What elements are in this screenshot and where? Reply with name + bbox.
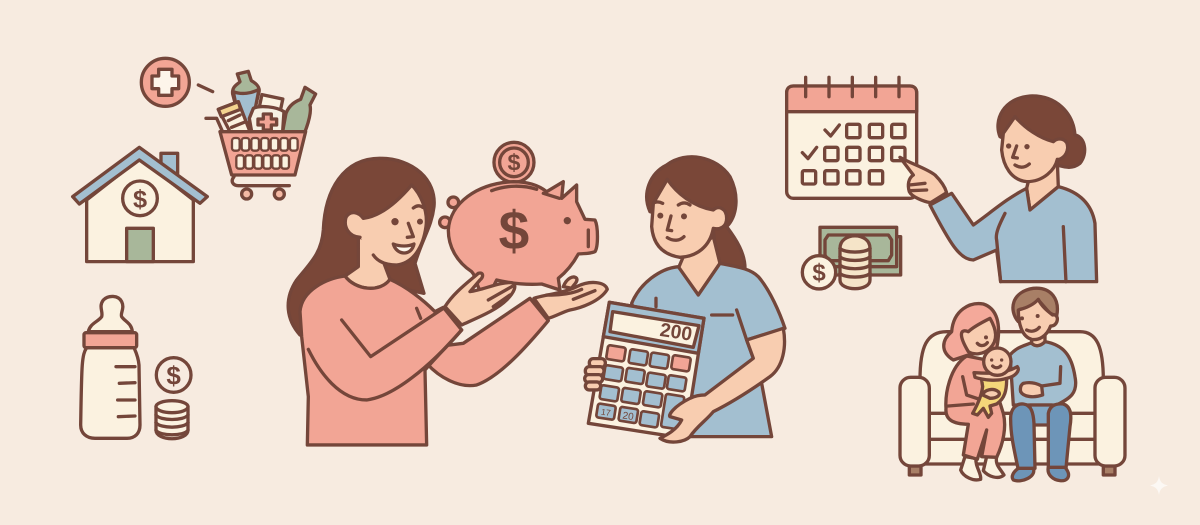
man (1013, 288, 1057, 322)
hair (288, 158, 434, 335)
character: woman pointing at calendar (900, 96, 1097, 282)
pointing hand (900, 157, 947, 203)
woman (944, 304, 999, 360)
icon: house with dollar sign: $ (133, 185, 147, 213)
icon: piggy bank with coin: $ (507, 150, 520, 176)
icon: house with dollar sign (73, 147, 207, 262)
baby (973, 377, 1007, 417)
neck (345, 237, 393, 288)
calculator: 17 (600, 407, 612, 418)
face (345, 185, 426, 265)
icon: piggy bank with coin: $ (499, 199, 529, 261)
hair (998, 96, 1085, 167)
far arm (427, 298, 548, 386)
sofa (920, 332, 1103, 464)
hair (647, 157, 745, 268)
icon: coin and stack beside bottle: $ (166, 360, 181, 390)
keypad (596, 345, 691, 430)
calculator: 200 (658, 320, 694, 346)
neck (678, 237, 720, 295)
icon: sparkle watermark (1150, 476, 1168, 495)
calculator: 20 (622, 410, 635, 423)
icon: coin and stack beside bottle (156, 358, 191, 439)
character: nurse holding calculator (585, 157, 785, 442)
face (1002, 117, 1068, 182)
icon: cash and coins: $ (812, 260, 826, 287)
far hand (563, 277, 577, 288)
icon: family on sofa (900, 288, 1125, 481)
calculator (588, 302, 704, 438)
icon: baby bottle (81, 296, 140, 438)
face (652, 179, 727, 257)
icon: medical cross (141, 58, 213, 106)
icon: piggy bank with coin (440, 142, 597, 290)
shirt (930, 187, 1097, 282)
character: woman holding piggy bank (288, 158, 577, 445)
left fingers (585, 359, 605, 390)
shirt (632, 263, 785, 437)
sweater (300, 276, 462, 445)
neck (1027, 160, 1058, 210)
arm and hand (660, 328, 785, 442)
icon: shopping cart with medicine (206, 71, 316, 199)
icon: cash and coins (802, 227, 901, 289)
icon: calendar with checkmarks (787, 77, 917, 198)
hands under piggy bank (445, 273, 607, 325)
